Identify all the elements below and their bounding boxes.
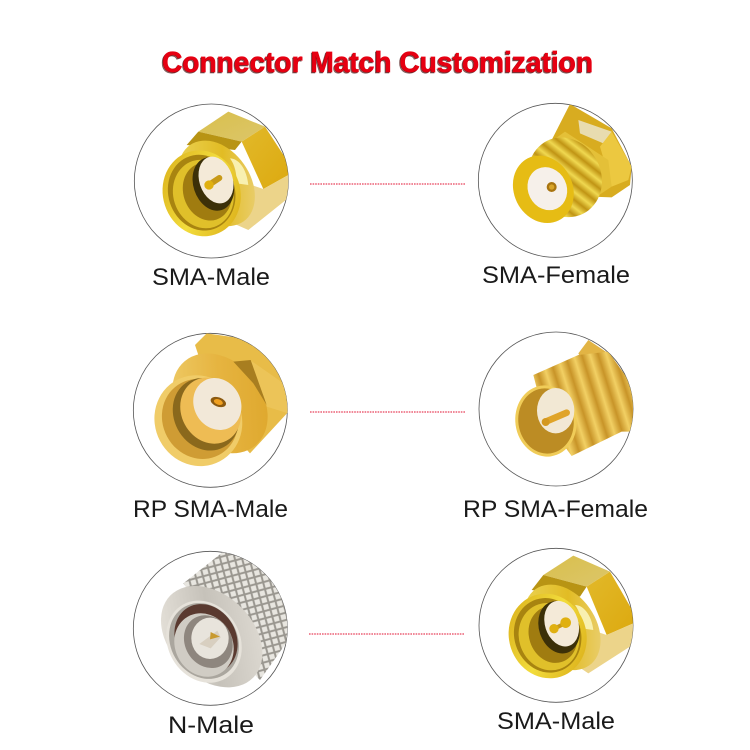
label: N-Male: N-Male bbox=[168, 712, 254, 739]
dotted connector line: row 1 bbox=[310, 183, 466, 185]
connector: SMA-Female top right bbox=[478, 103, 632, 257]
label: SMA-Female: SMA-Female bbox=[482, 262, 630, 289]
connector: SMA-Male top left bbox=[134, 104, 290, 258]
connector: RP SMA-Female middle right bbox=[479, 332, 633, 486]
dotted connector line: row 3 bbox=[309, 633, 465, 635]
label: RP SMA-Female: RP SMA-Female bbox=[463, 496, 648, 523]
connector: RP SMA-Male middle left bbox=[133, 333, 290, 487]
label: SMA-Male bottom: SMA-Male bbox=[497, 708, 615, 735]
dotted connector line: row 2 bbox=[310, 411, 466, 413]
connector: SMA-Male bottom right bbox=[479, 548, 635, 702]
label: RP SMA-Male: RP SMA-Male bbox=[133, 496, 288, 523]
connector: N-Male bottom left bbox=[133, 551, 290, 707]
label: SMA-Male: SMA-Male bbox=[152, 264, 270, 291]
title: Connector Match Customization bbox=[162, 47, 593, 79]
